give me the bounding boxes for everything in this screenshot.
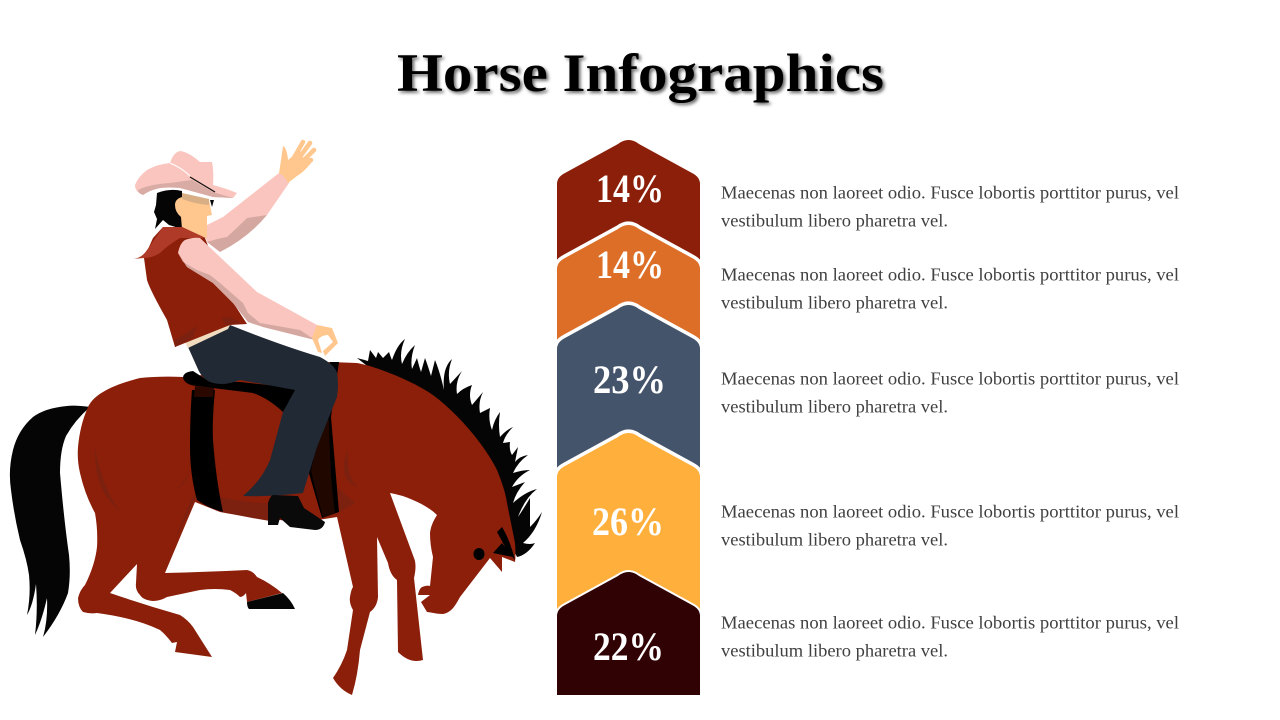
rider lower hand [312, 325, 338, 356]
cowboy hat [135, 151, 237, 198]
chevron 22% maroon: 22% [593, 624, 664, 669]
text block 5: Maecenas non laoreet odio. Fusce lobortis porttitor purus, vel [721, 612, 1179, 632]
text block 3: vestibulum libero pharetra vel. [721, 396, 948, 416]
rider belt [185, 325, 230, 348]
text block 4: Maecenas non laoreet odio. Fusce lobortis porttitor purus, vel [721, 502, 1179, 522]
rider raised hand [279, 142, 314, 183]
text block 3 [721, 368, 1179, 416]
rider boot [268, 495, 325, 530]
horse hoof [247, 593, 295, 609]
horse tail [10, 406, 90, 637]
rider back arm [203, 173, 289, 252]
rider face [175, 193, 212, 238]
chevron 26% amber: 26% [592, 499, 664, 544]
horse eye [474, 548, 484, 560]
chevron 23% slate [557, 305, 700, 500]
chevron 26% amber [557, 433, 700, 640]
text block 5 [721, 612, 1179, 660]
text block 1: Maecenas non laoreet odio. Fusce lobortis porttitor purus, vel [721, 182, 1179, 202]
horse ear [493, 527, 515, 560]
text block 2: Maecenas non laoreet odio. Fusce lobortis porttitor purus, vel [721, 264, 1179, 284]
text block 4 [721, 502, 1179, 550]
horse mane [357, 339, 542, 557]
horse body [78, 362, 516, 695]
chevron 14% orange [557, 225, 700, 370]
chart: stacked chevron percentage column [557, 140, 700, 695]
chevron 14% dark red: 14% [596, 166, 664, 211]
rider vest [133, 227, 247, 347]
horse muscle shading [95, 447, 358, 540]
illustration: cowboy riding a bucking horse [10, 142, 542, 695]
front cinch strap [308, 362, 339, 518]
chevron 23% slate: 23% [593, 357, 666, 402]
text block 2 [721, 264, 1179, 312]
text block 2: vestibulum libero pharetra vel. [721, 292, 948, 312]
rider trousers [188, 325, 338, 496]
vest collar [133, 227, 206, 259]
saddle [183, 371, 297, 412]
text block 4: vestibulum libero pharetra vel. [721, 530, 948, 550]
text block 3: Maecenas non laoreet odio. Fusce lobortis porttitor purus, vel [721, 368, 1179, 388]
text block 5: vestibulum libero pharetra vel. [721, 640, 948, 660]
chevron 22% maroon [557, 572, 700, 695]
title: Horse Infographics [397, 43, 884, 103]
chevron 14% dark red [557, 140, 700, 300]
rider hair [154, 190, 182, 229]
saddle girth strap [190, 390, 223, 512]
rider front arm [178, 238, 317, 340]
chevron 14% orange: 14% [596, 242, 664, 287]
text block 1: vestibulum libero pharetra vel. [721, 210, 948, 230]
text block 1 [721, 182, 1179, 230]
